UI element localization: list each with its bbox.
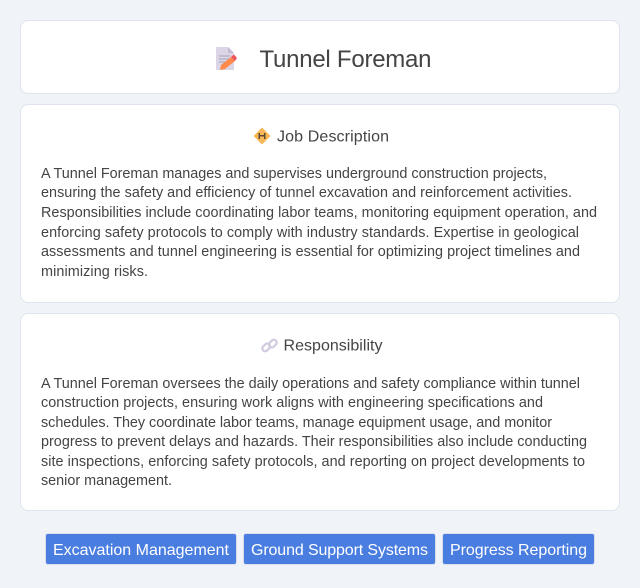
text: job description body: ensuring the safety and efficiency of tunnel excavation and reinforcement activities. — [41, 185, 572, 201]
text: job description body: A Tunnel Foreman manages and supervises underground construction projects, — [41, 166, 547, 182]
text: responsibility body: schedules. They coordinate labor teams, manage equipment usage, and monitor — [41, 415, 552, 431]
text: job description body — [41, 166, 597, 280]
tag: progress reporting — [443, 534, 594, 564]
text: job description body: enforcing safety protocols to comply with industry standards. Expertise in geological — [41, 225, 579, 241]
tag: ground support systems — [244, 534, 435, 564]
tag: excavation management: Excavation Management — [53, 542, 230, 559]
icon: chain link — [261, 338, 278, 352]
icon: diamond sign — [254, 128, 270, 144]
heading: job description: Job Description — [277, 128, 389, 146]
tag: progress reporting: Progress Reporting — [450, 542, 587, 559]
icon: document with pencil — [216, 47, 237, 70]
heading: responsibility: Responsibility — [284, 338, 382, 354]
text: job description body: assessments and tunnel engineering is essential for optimizing project timelines and — [41, 244, 580, 260]
text: responsibility body: progress to prevent delays and hazards. Their responsibilities also include conducting — [41, 434, 587, 450]
text: responsibility body: senior management. — [41, 473, 172, 489]
tag: ground support systems: Ground Support Systems — [251, 542, 428, 559]
text: job description body: Responsibilities include coordinating labor teams, monitoring equipment operation, and — [41, 205, 597, 221]
text: responsibility body — [41, 376, 587, 489]
text: responsibility body: A Tunnel Foreman oversees the daily operations and safety compliance within tunnel — [41, 376, 580, 392]
text: responsibility body: site inspections, enforcing safety protocols, and reporting on project developments to — [41, 454, 585, 470]
text: responsibility body: construction projects, ensuring work aligns with engineering specifications and — [41, 395, 543, 411]
title: Tunnel Foreman — [260, 46, 432, 73]
text: job description body: minimizing risks. — [41, 264, 148, 280]
panel: title header — [20, 20, 620, 94]
panel: responsibility — [20, 313, 620, 511]
panel: job description — [20, 104, 620, 303]
tag: excavation management — [46, 534, 236, 564]
